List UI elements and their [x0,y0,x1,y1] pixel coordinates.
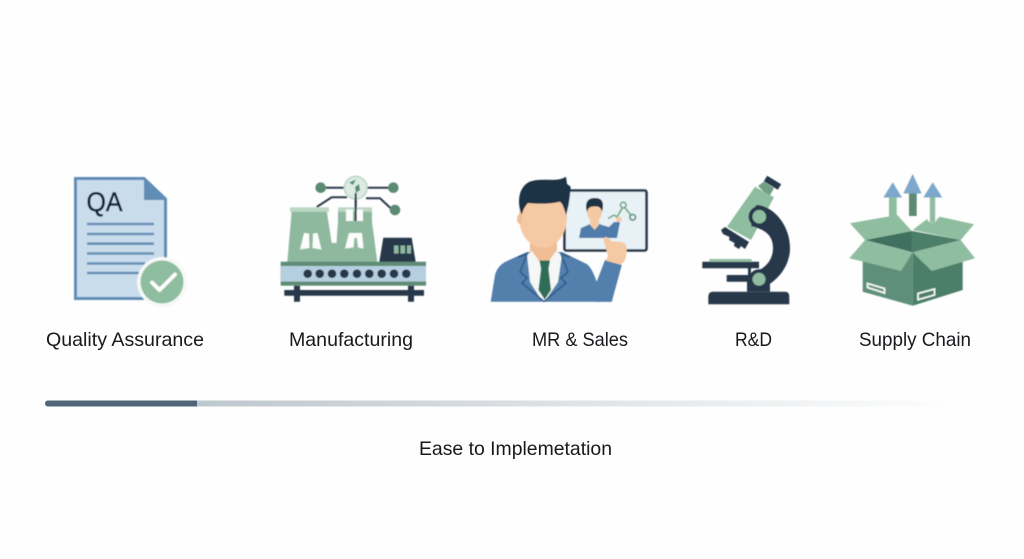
label: Supply Chain: Supply Chain [859,329,971,351]
label: MR & Sales: MR & Sales [532,329,628,351]
panel: MR and sales [491,177,646,351]
panel: R and D [702,178,790,351]
icon: microscope [702,178,790,304]
label: Quality Assurance: Quality Assurance [46,329,204,351]
label: Manufacturing: Manufacturing [289,329,413,351]
icon: QA document [76,178,187,307]
progress bar [45,400,960,406]
panel: quality assurance [46,178,204,351]
panel: manufacturing [281,176,426,351]
icon: open box with arrows [849,174,975,306]
panel: supply chain [849,174,975,351]
icon: factory with network [281,176,426,302]
icon: QA document: QA [86,187,123,217]
label: R&D: R&D [735,329,772,351]
axis label: Ease to Implemetation: Ease to Implemetation [419,438,612,460]
icon: representative with tablet [491,177,646,302]
